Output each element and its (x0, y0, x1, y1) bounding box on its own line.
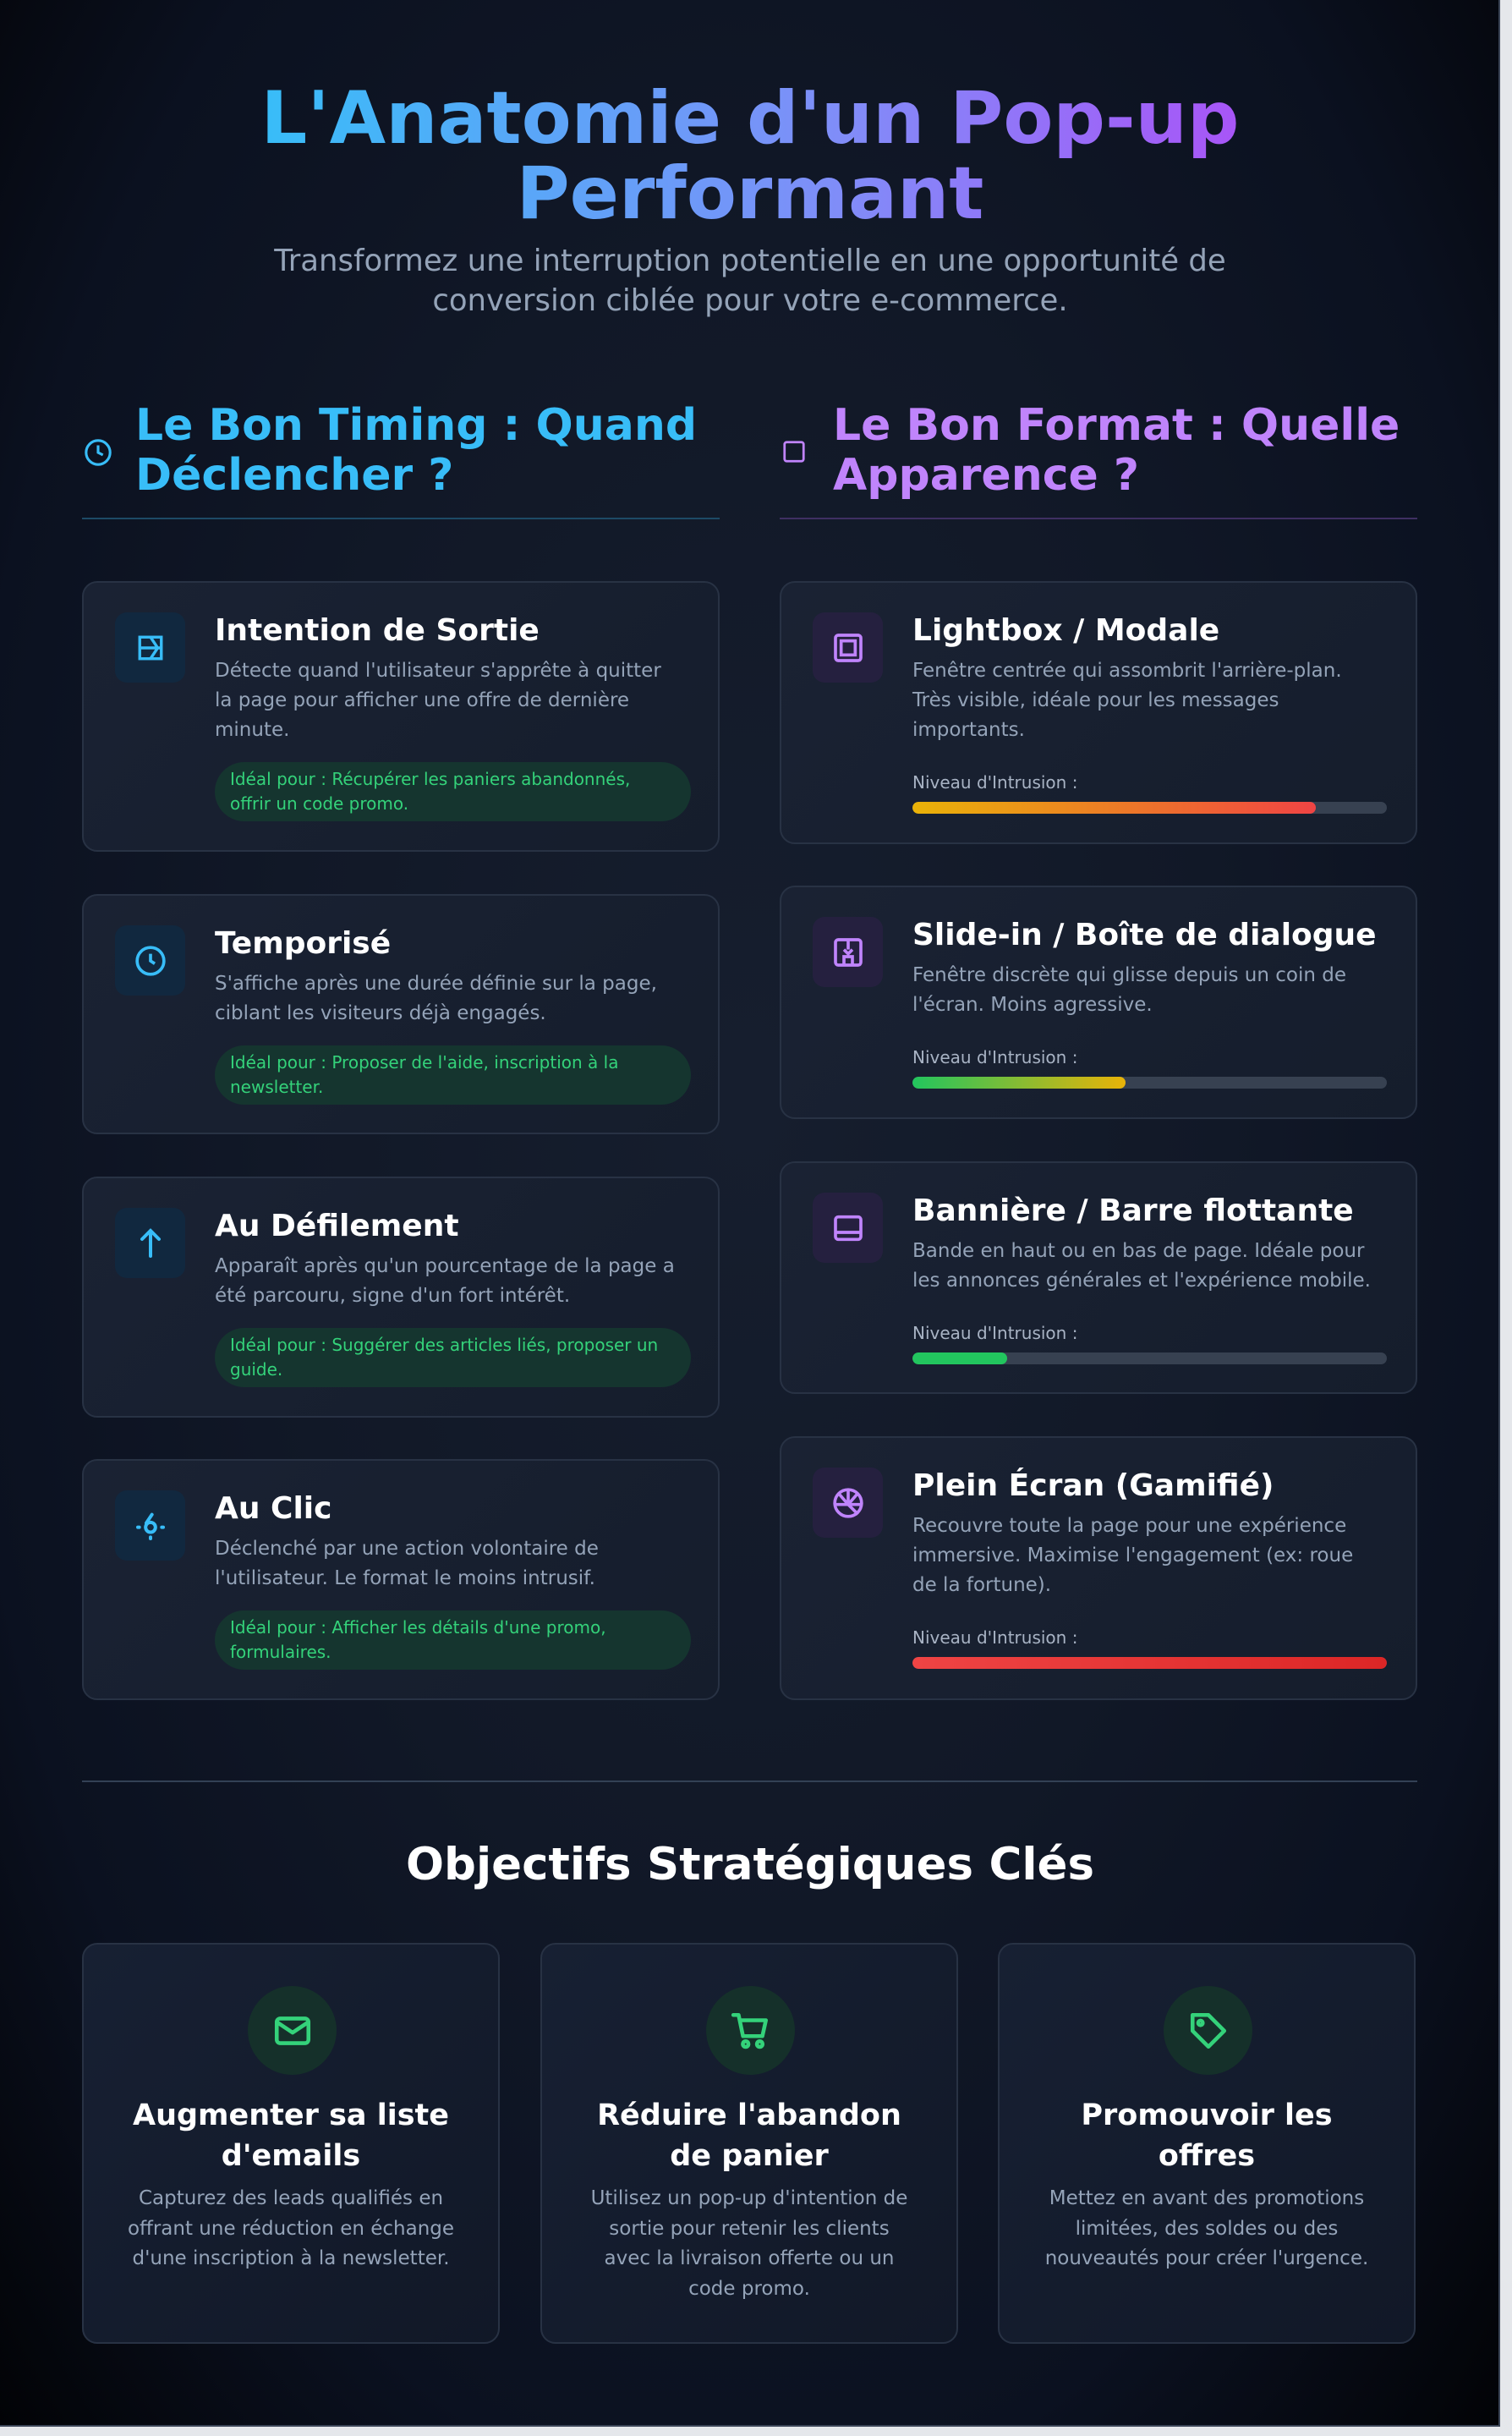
card: Plein Écran: Niveau d'Intrusion : (912, 1627, 1077, 1648)
card: Au Défilement: Idéal pour : Suggérer des articles liés, proposer un (230, 1335, 658, 1355)
card: offres: nouveautés pour créer l'urgence. (1045, 2247, 1368, 2269)
subtitle: Transformez une interruption potentielle en une opportunité de (274, 244, 1226, 278)
card: emails: d'emails (222, 2139, 360, 2173)
card: Slide-in (780, 886, 1417, 1119)
heading: timing (82, 401, 720, 519)
card: Lightbox: Fenêtre centrée qui assombrit l'arrière-plan. (912, 660, 1342, 682)
card: Intention de Sortie: Intention de Sortie (215, 613, 540, 648)
card: Slide-in: Slide-in / Boîte de dialogue (912, 918, 1377, 952)
card: panier: Utilisez un pop-up d'intention de (591, 2187, 907, 2209)
card: offres: limitées, des soldes ou des (1076, 2218, 1338, 2240)
heading: format: Apparence ? (833, 450, 1139, 501)
card: Bannière: les annonces générales et l'expérience mobile. (912, 1270, 1371, 1292)
icon: cart (706, 1986, 795, 2075)
card: Intention de Sortie: Idéal pour : Récupérer les paniers abandonnés, (230, 769, 630, 789)
card: Au Défilement: Apparaît après qu'un pourcentage de la page a (215, 1255, 675, 1277)
card: Plein Écran: de la fortune). (912, 1574, 1051, 1596)
card: panier: sortie pour retenir les clients (609, 2218, 890, 2240)
card: Bannière: Niveau d'Intrusion : (912, 1323, 1077, 1343)
icon: tag (1164, 1986, 1252, 2075)
card: Bannière (780, 1161, 1417, 1394)
icon: lightbox (813, 612, 883, 683)
card: emails: Capturez des leads qualifiés en (139, 2187, 443, 2209)
heading: timing: Déclencher ? (135, 450, 453, 501)
card: Intention de Sortie: Détecte quand l'utilisateur s'apprête à quitter (215, 660, 661, 682)
card: Au Clic: formulaires. (230, 1642, 331, 1662)
card: Temporisé: Idéal pour : Proposer de l'aide, inscription à la (230, 1052, 618, 1073)
card: Temporisé (82, 894, 720, 1134)
subtitle (274, 244, 1226, 318)
card: emails: Augmenter sa liste (133, 2099, 449, 2132)
title: L'Anatomie d'un Pop-up (261, 76, 1239, 161)
card: emails (82, 1943, 500, 2344)
card: Au Clic (82, 1459, 720, 1700)
card: Slide-in: l'écran. Moins agressive. (912, 994, 1153, 1016)
icon: square (783, 441, 805, 463)
card: Au Défilement: Au Défilement (215, 1209, 459, 1243)
card: panier (540, 1943, 958, 2344)
heading: format: Le Bon Format : Quelle (833, 400, 1400, 451)
card: panier: avec la livraison offerte ou un (604, 2247, 895, 2269)
card: offres (998, 1943, 1416, 2344)
card: Bannière: Bannière / Barre flottante (912, 1193, 1354, 1228)
card: Au Clic: l'utilisateur. Le format le moins intrusif. (215, 1567, 595, 1589)
card: Lightbox: Niveau d'Intrusion : (912, 772, 1077, 793)
subtitle: conversion ciblée pour votre e-commerce. (432, 283, 1068, 318)
card: Intention de Sortie (82, 581, 720, 852)
card: Au Clic: Au Clic (215, 1491, 331, 1526)
icon: banner (813, 1193, 883, 1263)
card: Temporisé: S'affiche après une durée définie sur la page, (215, 973, 657, 995)
icon: wheel (813, 1468, 883, 1538)
card: Bannière: Bande en haut ou en bas de page. Idéale pour (912, 1240, 1364, 1262)
card: Au Défilement (82, 1177, 720, 1418)
card: offres: Promouvoir les (1081, 2099, 1333, 2132)
card: Au Défilement: guide. (230, 1359, 282, 1380)
card: panier: de panier (670, 2139, 829, 2173)
card: Intention de Sortie: minute. (215, 719, 289, 741)
icon: exit (115, 612, 185, 683)
icon: mail (248, 1986, 337, 2075)
card: Plein Écran: Recouvre toute la page pour une expérience (912, 1515, 1346, 1537)
card: Temporisé: Temporisé (215, 926, 391, 961)
card: Lightbox: importants. (912, 719, 1025, 741)
card: emails: d'une inscription à la newsletter. (132, 2247, 450, 2269)
title: Performant (517, 151, 983, 236)
card: emails: offrant une réduction en échange (128, 2218, 454, 2240)
card: Intention de Sortie: la page pour afficher une offre de dernière (215, 689, 629, 711)
card: offres: Mettez en avant des promotions (1049, 2187, 1364, 2209)
card: Plein Écran: Plein Écran (Gamifié) (912, 1468, 1274, 1503)
card: offres: offres (1159, 2139, 1255, 2173)
heading: timing: Le Bon Timing : Quand (135, 400, 697, 451)
card: Slide-in: Niveau d'Intrusion : (912, 1047, 1077, 1067)
card: Intention de Sortie: offrir un code promo. (230, 793, 408, 814)
icon: slide-in (813, 917, 883, 987)
heading: format (780, 401, 1417, 519)
card: Lightbox (780, 581, 1417, 844)
card: Slide-in: Fenêtre discrète qui glisse depuis un coin de (912, 964, 1346, 986)
card: Plein Écran: immersive. Maximise l'engagement (ex: roue (912, 1544, 1353, 1566)
card: Temporisé: ciblant les visiteurs déjà engagés. (215, 1002, 546, 1024)
title (261, 76, 1239, 236)
card: Lightbox: Lightbox / Modale (912, 613, 1219, 648)
card: panier: code promo. (688, 2277, 810, 2299)
icon: click (115, 1490, 185, 1561)
card: Au Défilement: été parcouru, signe d'un fort intérêt. (215, 1285, 570, 1307)
card: Plein Écran (780, 1436, 1417, 1700)
icon: arrow up (115, 1208, 185, 1278)
card: Temporisé: newsletter. (230, 1077, 323, 1097)
icon: clock (115, 925, 185, 996)
card: Au Clic: Idéal pour : Afficher les détails d'une promo, (230, 1617, 606, 1638)
card: panier: Réduire l'abandon (597, 2099, 901, 2132)
card: Lightbox: Très visible, idéale pour les messages (912, 689, 1279, 711)
icon: clock (85, 439, 112, 466)
card: Au Clic: Déclenché par une action volontaire de (215, 1538, 599, 1560)
heading: objectifs: Objectifs Stratégiques Clés (406, 1839, 1094, 1890)
